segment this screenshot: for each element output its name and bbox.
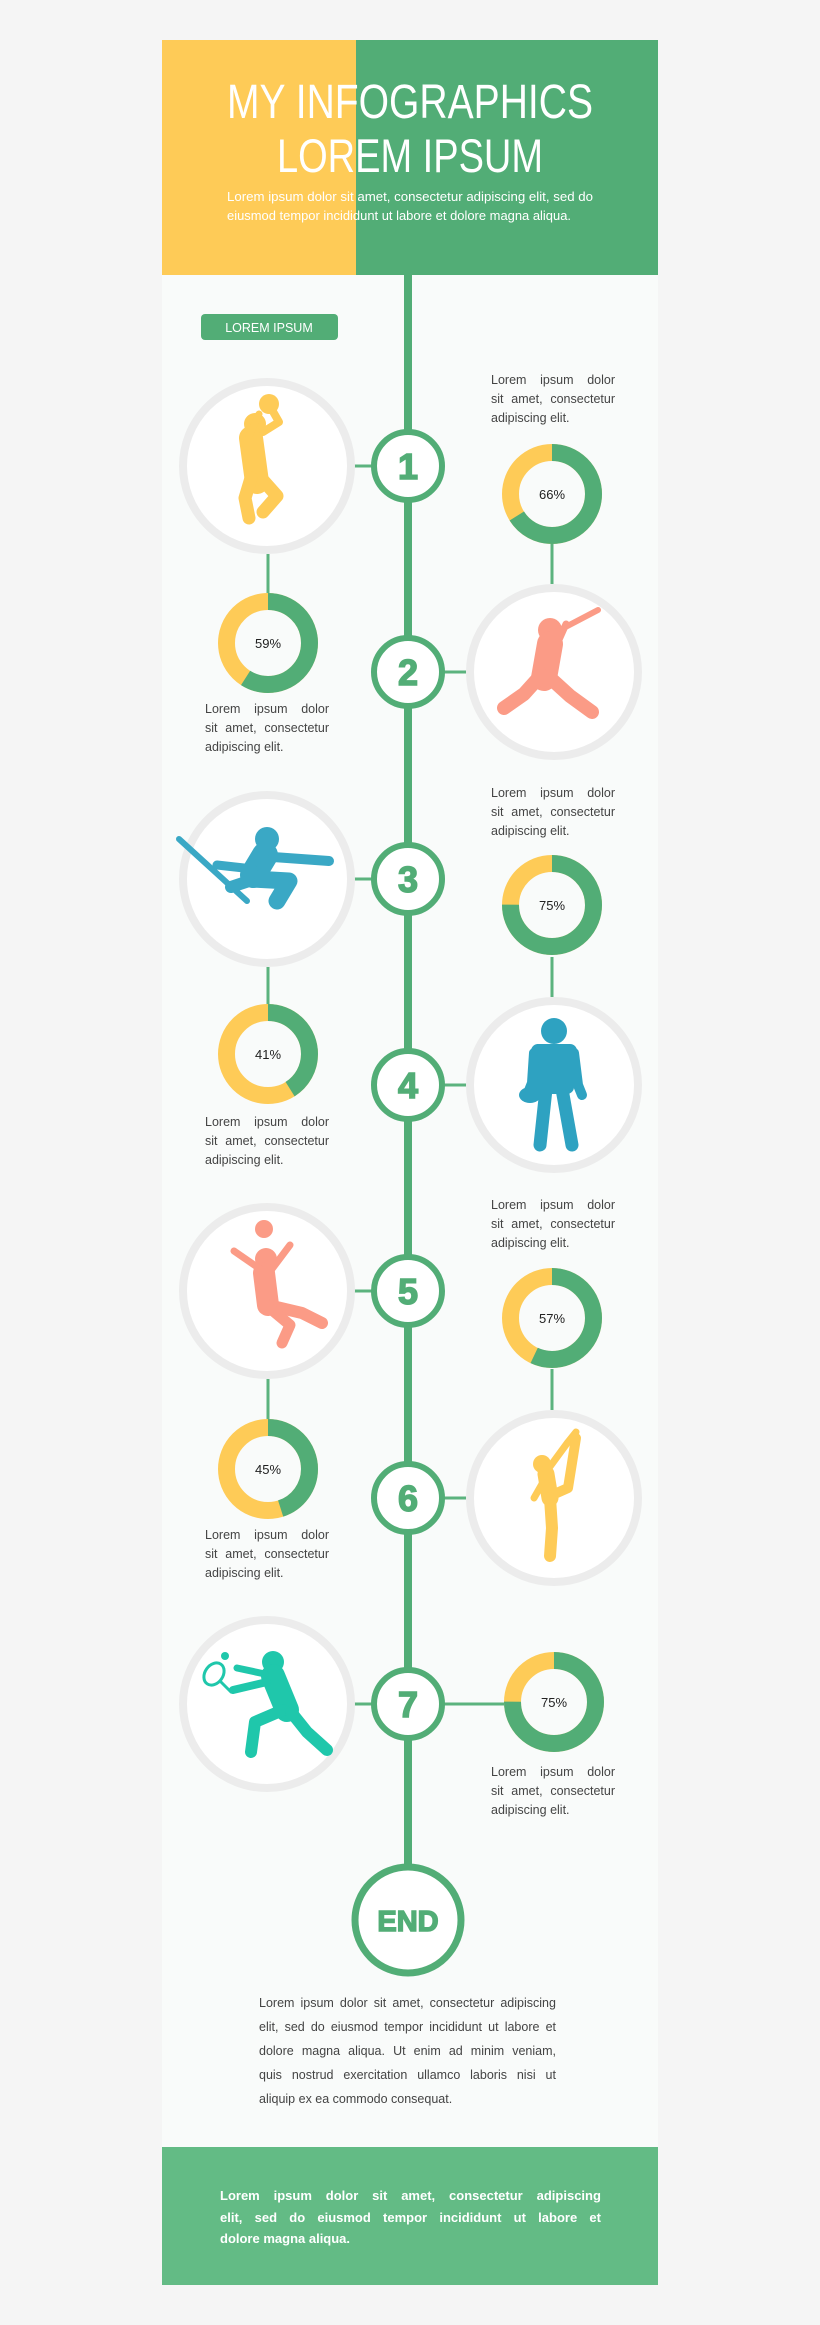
text: row 2: dolor (301, 702, 329, 716)
text: row 5: adipiscing elit. (491, 1236, 570, 1250)
text: end paragraph: exercitation (343, 2068, 407, 2082)
footer (162, 2147, 658, 2285)
text: row 2: Lorem (205, 702, 240, 716)
text: row 5: ipsum (540, 1198, 573, 1212)
text: end paragraph: ut (546, 2068, 556, 2082)
text: row 2: adipiscing elit. (205, 740, 284, 754)
footer text: consectetur (449, 2188, 523, 2203)
text: row 1: consectetur (550, 392, 615, 406)
big circles (183, 382, 638, 1788)
numbers: 4 (398, 1065, 418, 1106)
text: end paragraph: Lorem (259, 1996, 294, 2010)
icon: snowboarder (179, 827, 329, 901)
footer text: elit, (220, 2210, 242, 2224)
text: row 7: adipiscing elit. (491, 1803, 570, 1817)
text: row 1: sit (491, 392, 504, 406)
text: row 5: consectetur (550, 1217, 615, 1231)
text: end paragraph: dolore (259, 2044, 294, 2058)
title: MY INFOGRAPHICS (227, 76, 593, 129)
text: row 7: ipsum (540, 1765, 573, 1779)
number circles (355, 432, 461, 1973)
text: row 2: consectetur (264, 721, 329, 735)
text: end paragraph: incididunt (429, 2020, 482, 2034)
donuts: 75% (539, 898, 565, 913)
text: end paragraph: nostrud (292, 2068, 334, 2082)
text: row 6: ipsum (254, 1528, 287, 1542)
text: row 3: Lorem (491, 786, 526, 800)
footer text: eiusmod (317, 2210, 371, 2224)
text: end paragraph: nisi (517, 2068, 536, 2082)
footer text: ut (514, 2210, 526, 2224)
text: row 5 (491, 1198, 615, 1250)
text: row 6 (205, 1528, 329, 1580)
footer text: et (589, 2210, 601, 2224)
text: end paragraph: aliqua. (348, 2044, 385, 2058)
donuts: 57% (539, 1311, 565, 1326)
footer text: incididunt (439, 2210, 501, 2224)
text: row 1: ipsum (540, 373, 573, 387)
text: row 6: dolor (301, 1528, 329, 1542)
text: row 7: sit (491, 1784, 504, 1798)
text: row 3: adipiscing elit. (491, 824, 570, 838)
text: end paragraph: sit (374, 1996, 386, 2010)
title: Lorem ipsum dolor sit amet, consectetur adipiscing elit, sed do (227, 190, 593, 204)
text: row 5: sit (491, 1217, 504, 1231)
text: row 6: sit (205, 1547, 218, 1561)
icon: football player (519, 1018, 582, 1145)
text: row 4: amet, (225, 1134, 257, 1148)
numbers: END (377, 1906, 439, 1938)
text: end paragraph: veniam, (512, 2044, 556, 2058)
text: row 1: Lorem (491, 373, 526, 387)
text: row 6: Lorem (205, 1528, 240, 1542)
text: end paragraph: Ut (393, 2044, 406, 2058)
timeline line (404, 275, 412, 1865)
text: end paragraph: magna (302, 2044, 340, 2058)
numbers: 2 (398, 652, 418, 693)
text: row 3: amet, (511, 805, 543, 819)
footer text: Lorem (220, 2188, 260, 2203)
text: end paragraph: dolor (340, 1996, 368, 2010)
text: row 2 (205, 702, 329, 754)
button: lorem ipsum: LOREM IPSUM (225, 321, 313, 335)
text: row 4: dolor (301, 1115, 329, 1129)
text: end paragraph: eiusmod (331, 2020, 378, 2034)
footer text: sed (255, 2210, 277, 2224)
icon: volleyball player (234, 1220, 322, 1343)
donuts: 45% (255, 1462, 281, 1477)
panel: main background (162, 40, 658, 2285)
text: row 2: ipsum (254, 702, 287, 716)
text: row 4: ipsum (254, 1115, 287, 1129)
text: end paragraph: ullamco (417, 2068, 460, 2082)
icon: baseball batter (504, 610, 598, 712)
numbers: 7 (398, 1684, 418, 1725)
text: end paragraph: labore (505, 2020, 539, 2034)
icon: figure skater (533, 1432, 576, 1556)
title: eiusmod tempor incididunt ut labore et dolore magna aliqua. (227, 209, 571, 223)
text: row 3: consectetur (550, 805, 615, 819)
footer text: labore (538, 2210, 577, 2224)
footer text: dolore magna aliqua. (220, 2231, 350, 2246)
text: row 4: sit (205, 1134, 218, 1148)
text: row 1: adipiscing elit. (491, 411, 570, 425)
text: end paragraph: ut (488, 2020, 499, 2034)
text: row 3: dolor (587, 786, 615, 800)
text: row 5: Lorem (491, 1198, 526, 1212)
text: row 4: Lorem (205, 1115, 240, 1129)
text: end paragraph: consectetur (430, 1996, 494, 2010)
text: row 7: Lorem (491, 1765, 526, 1779)
connectors (268, 466, 552, 1704)
donuts (226, 452, 596, 1744)
title (227, 76, 593, 223)
text: end paragraph: sed (285, 2020, 305, 2034)
icon: tennis player (200, 1651, 327, 1752)
text: row 2: sit (205, 721, 218, 735)
text: row 6: amet, (225, 1547, 257, 1561)
footer text: ipsum (274, 2188, 312, 2203)
footer text: do (289, 2210, 305, 2224)
text: row 1: dolor (587, 373, 615, 387)
text: end paragraph: ad (449, 2044, 463, 2058)
icon: basketball player (244, 394, 279, 518)
text: end paragraph: do (311, 2020, 325, 2034)
text: row 7: consectetur (550, 1784, 615, 1798)
numbers: 3 (398, 859, 418, 900)
donuts: 59% (255, 636, 281, 651)
text: end paragraph (259, 1996, 556, 2106)
button: lorem ipsum (201, 314, 338, 340)
text: row 7 (491, 1765, 615, 1817)
text: row 4: consectetur (264, 1134, 329, 1148)
donuts: 66% (539, 487, 565, 502)
text: row 3: sit (491, 805, 504, 819)
text: row 5: amet, (511, 1217, 543, 1231)
text: end paragraph: laboris (470, 2068, 507, 2082)
text: row 2: amet, (225, 721, 257, 735)
header (162, 40, 658, 275)
text: row 5: dolor (587, 1198, 615, 1212)
text: end paragraph: quis (259, 2068, 282, 2082)
numbers: 6 (398, 1478, 418, 1519)
title: LOREM IPSUM (277, 129, 543, 182)
numbers: 1 (398, 446, 418, 487)
text: row 6: adipiscing elit. (205, 1566, 284, 1580)
text: row 7: dolor (587, 1765, 615, 1779)
text: end paragraph: et (546, 2020, 556, 2034)
footer text: dolor (326, 2188, 358, 2203)
footer text: sit (372, 2188, 387, 2203)
text: end paragraph: minim (471, 2044, 504, 2058)
text: row 1 (491, 373, 615, 425)
donuts: 41% (255, 1047, 281, 1062)
numbers (377, 446, 439, 1938)
text: end paragraph: aliquip ex ea commodo consequat. (259, 2092, 452, 2106)
text: end paragraph: tempor (384, 2020, 423, 2034)
text: row 6: consectetur (264, 1547, 329, 1561)
text: row 3 (491, 786, 615, 838)
numbers: 5 (398, 1271, 418, 1312)
donuts: 75% (541, 1695, 567, 1710)
text: row 3: ipsum (540, 786, 573, 800)
text: end paragraph: elit, (259, 2020, 278, 2034)
text: row 7: amet, (511, 1784, 543, 1798)
text: end paragraph: amet, (392, 1996, 424, 2010)
text: end paragraph: enim (414, 2044, 441, 2058)
text: end paragraph: ipsum (300, 1996, 334, 2010)
footer text (220, 2188, 601, 2246)
footer text: amet, (401, 2188, 435, 2203)
footer text: tempor (383, 2210, 427, 2224)
text: row 4 (205, 1115, 329, 1167)
text: row 1: amet, (511, 392, 543, 406)
text: row 4: adipiscing elit. (205, 1153, 284, 1167)
text: end paragraph: adipiscing (500, 1996, 556, 2010)
footer text: adipiscing (537, 2188, 601, 2203)
